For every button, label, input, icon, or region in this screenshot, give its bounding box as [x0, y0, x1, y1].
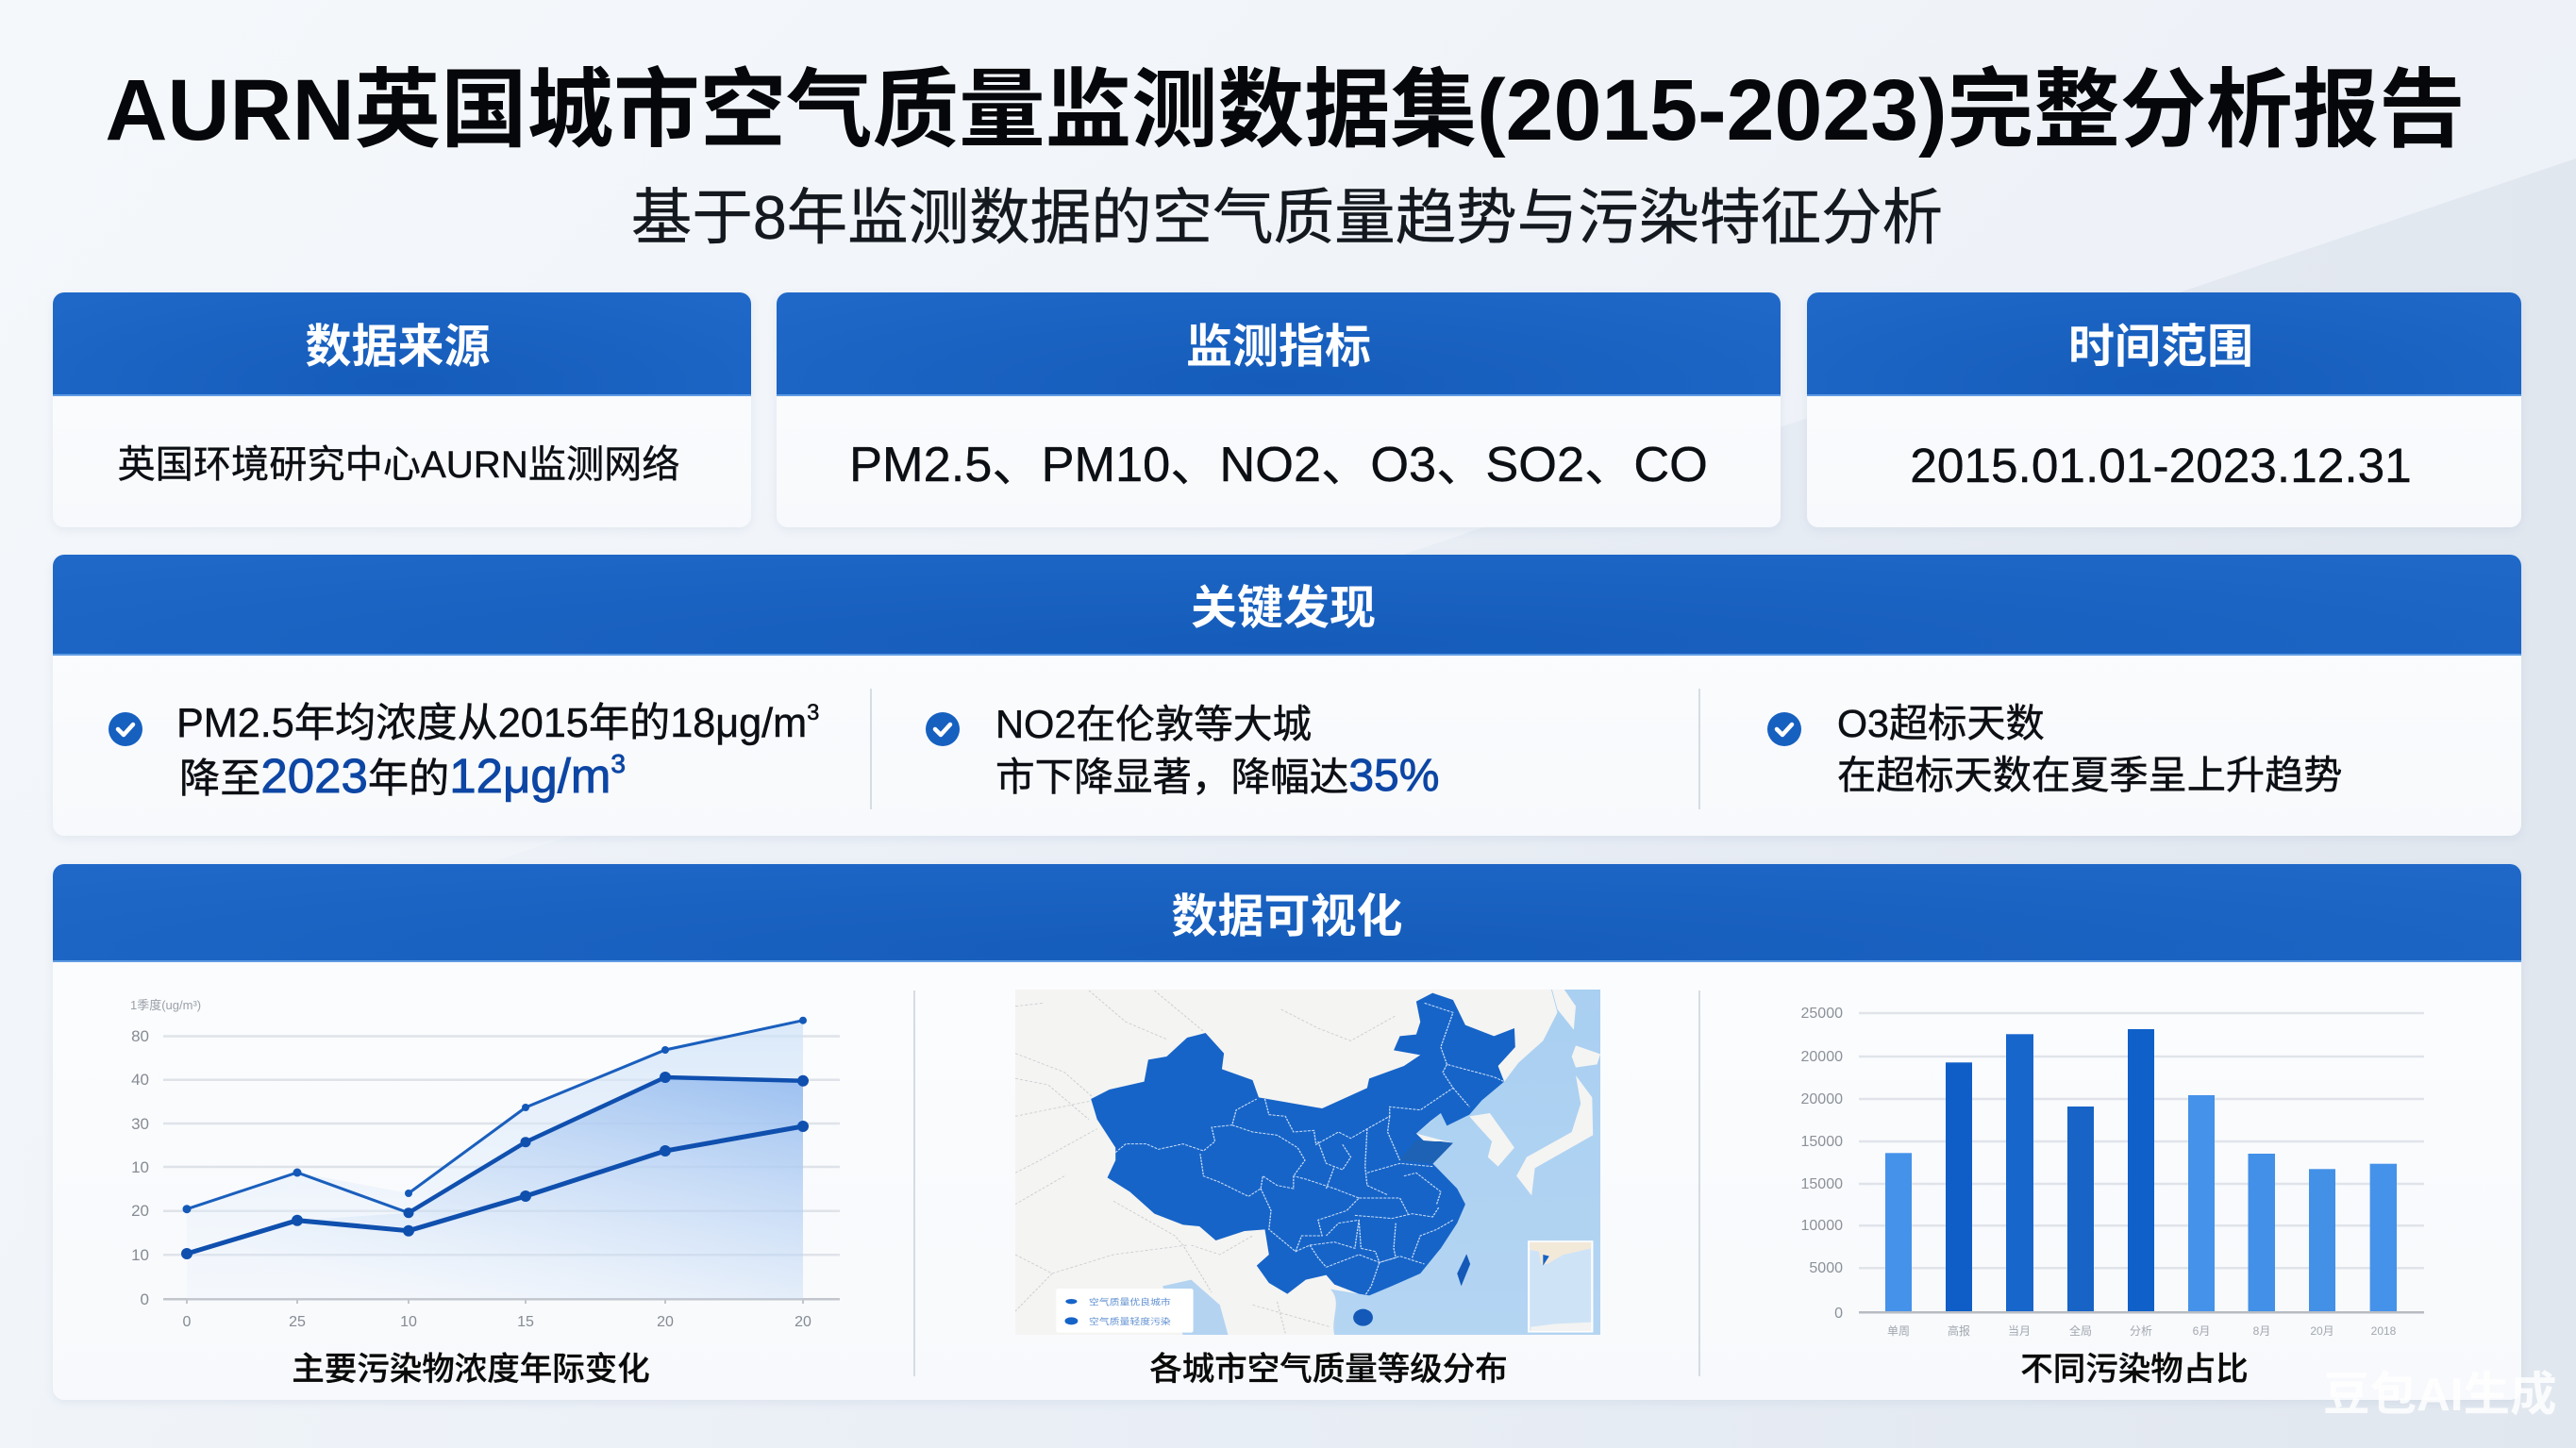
y axis labels: 10 [131, 1158, 149, 1176]
faint borders [1015, 990, 1396, 1333]
bars [1885, 1029, 2397, 1312]
finding 1: PM2.5年均浓度从2015年的18μg/m3 [176, 700, 819, 746]
legend: 空气质量优良城市 [1089, 1297, 1171, 1307]
x axis labels [183, 1314, 811, 1330]
bay of bengal [1163, 1280, 1228, 1335]
y axis labels: 25000 [1800, 1006, 1843, 1022]
heading: indicators [777, 292, 1781, 396]
finding 2 [995, 702, 1439, 801]
text: data source: 英国环境研究中心AURN监测网络 [117, 443, 680, 486]
hainan [1353, 1309, 1373, 1326]
panel: key findings [53, 555, 2521, 836]
taiwan [1457, 1254, 1470, 1286]
y axis labels [131, 1027, 149, 1308]
x axis labels: 6月 [2193, 1324, 2210, 1338]
y axis labels [1800, 1006, 1843, 1322]
area fill lower [187, 1077, 803, 1299]
finding 3: O3超标天数 [1837, 702, 2045, 745]
heading: time range [1807, 292, 2521, 396]
x axis labels [1887, 1323, 2397, 1338]
finding 2: 市下降显著，降幅达35% [995, 751, 1439, 801]
area fill upper [187, 1021, 803, 1299]
icon: check 1 [109, 712, 142, 746]
heading: data visualization [53, 864, 2521, 962]
caption: bar chart: 不同污染物占比 [2020, 1352, 2249, 1388]
neighbouring land [1469, 990, 1600, 1195]
finding 3 [1837, 702, 2342, 797]
y axis labels: 15000 [1800, 1134, 1843, 1150]
x axis labels: 全局 [2069, 1323, 2092, 1338]
shandong [1400, 1140, 1453, 1164]
x axis labels: 20月 [2310, 1324, 2334, 1338]
panel: indicators [777, 292, 1781, 527]
heading: data source [53, 292, 751, 396]
y axis labels: 40 [131, 1071, 149, 1089]
line chart [130, 998, 840, 1330]
x axis labels: 2018 [2371, 1324, 2397, 1338]
x axis labels: 10 [400, 1314, 417, 1330]
caption: map: 各城市空气质量等级分布 [1149, 1352, 1508, 1388]
y axis labels: 20000 [1800, 1091, 1843, 1107]
x axis labels: 20 [657, 1314, 674, 1330]
y axis labels: 0 [141, 1290, 149, 1308]
y axis labels: 15000 [1800, 1176, 1843, 1192]
heading: data source: 数据来源 [305, 322, 491, 373]
x axis labels: 0 [183, 1314, 192, 1330]
middle line [404, 1072, 809, 1218]
title: AURN英国城市空气质量监测数据集(2015-2023)完整分析报告 [105, 62, 2466, 158]
heading: indicators: 监测指标 [1186, 322, 1371, 373]
x axis labels: 20 [795, 1314, 811, 1330]
heading: key findings: 关键发现 [1191, 583, 1376, 634]
watermark: 豆包AI生成 [2323, 1369, 2557, 1421]
province borders [1115, 1003, 1504, 1295]
map [1015, 990, 1600, 1335]
heading: time range: 时间范围 [2068, 322, 2253, 373]
finding 1 [176, 700, 819, 803]
subtitle: 基于8年监测数据的空气质量趋势与污染特征分析 [631, 184, 1943, 252]
y axis labels: 20000 [1800, 1049, 1843, 1065]
x axis labels: 单周 [1887, 1324, 1910, 1338]
panel: time range [1807, 292, 2521, 527]
upper line [183, 1017, 807, 1213]
china mainland [1091, 993, 1515, 1295]
finding 2: NO2在伦敦等大城 [995, 702, 1312, 746]
text: time range: 2015.01.01-2023.12.31 [1910, 438, 2412, 492]
panel: data source [53, 292, 751, 527]
sea [1330, 990, 1600, 1335]
heading: data visualization: 数据可视化 [1171, 891, 1402, 942]
legend: 空气质量轻度污染 [1089, 1316, 1171, 1327]
y axis labels: 5000 [1809, 1260, 1843, 1276]
y axis labels: 10 [131, 1246, 149, 1264]
x axis labels: 15 [517, 1314, 534, 1330]
x axis labels: 分析 [2130, 1324, 2152, 1338]
finding 1: 降至2023年的12μg/m3 [179, 749, 626, 803]
text: indicators: PM2.5、PM10、NO2、O3、SO2、CO [849, 438, 1708, 492]
lower line [181, 1121, 809, 1259]
y axis labels: 10000 [1800, 1218, 1843, 1234]
inset map [1529, 1241, 1592, 1332]
y axis labels: 80 [131, 1027, 149, 1045]
caption: line chart: 主要污染物浓度年际变化 [292, 1352, 650, 1388]
y axis labels: 20 [131, 1202, 149, 1220]
unit label: 1季度(ug/m³) [130, 998, 201, 1012]
heading: key findings [53, 555, 2521, 656]
legend [1056, 1289, 1194, 1333]
finding 3: 在超标天数在夏季呈上升趋势 [1837, 754, 2342, 797]
y axis labels: 0 [1834, 1306, 1843, 1322]
y axis labels: 30 [131, 1115, 149, 1133]
x axis labels: 高报 [1948, 1323, 1970, 1338]
x axis labels: 25 [289, 1314, 306, 1330]
icon: check 2 [926, 712, 960, 746]
icon: check 3 [1767, 712, 1801, 746]
bar chart [1800, 1006, 2424, 1338]
panel: data visualization [53, 864, 2521, 1400]
x axis labels: 当月 [2008, 1324, 2031, 1338]
x axis labels: 8月 [2253, 1324, 2270, 1338]
